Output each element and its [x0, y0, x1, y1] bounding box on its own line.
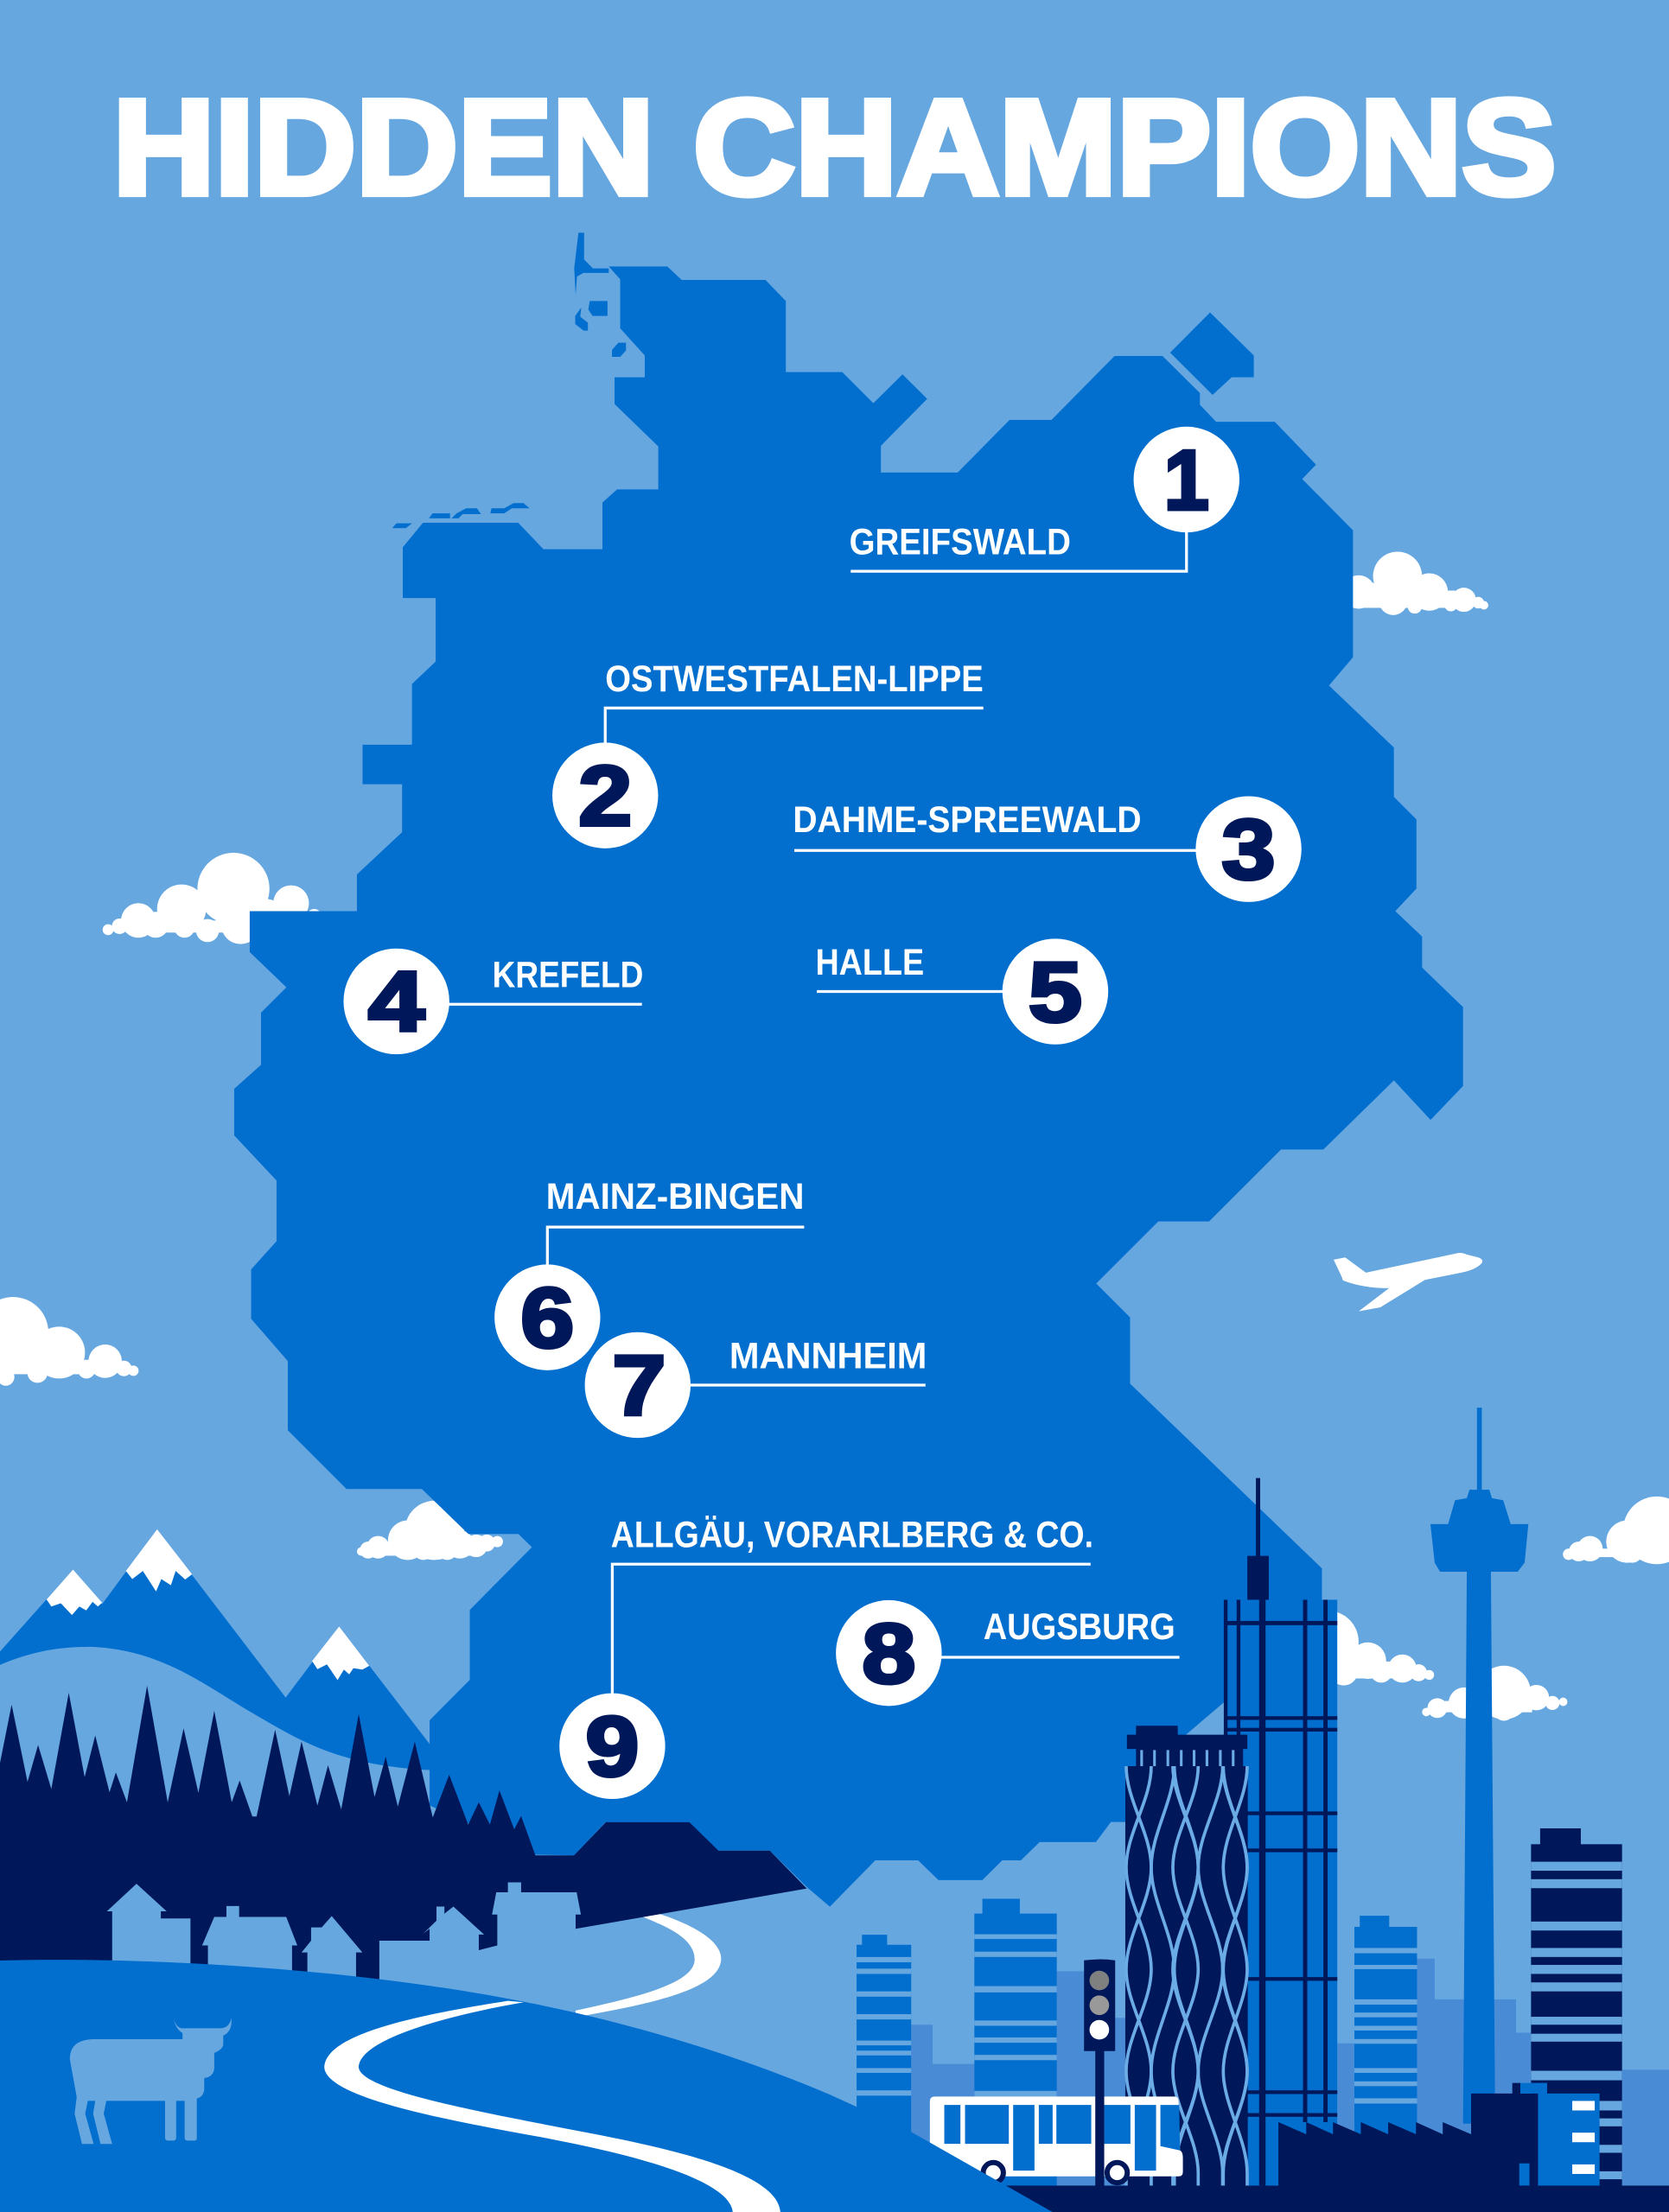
- ground: [991, 2185, 1669, 2212]
- location 6: Mainz-Bingen: [494, 1176, 804, 1370]
- striped building 3: [1354, 1916, 1417, 2185]
- TV tower: [1430, 1408, 1528, 2124]
- location 7: Mannheim: [585, 1332, 927, 1438]
- river: far bend: [564, 1914, 721, 2017]
- alpine landscape: [0, 1529, 806, 2017]
- leader line: [817, 991, 1013, 993]
- leader line: [440, 1003, 642, 1005]
- clouds: [0, 551, 1669, 1720]
- number badge: 8: [862, 1605, 915, 1700]
- foothill: [0, 1647, 430, 1848]
- traffic light: [1084, 1960, 1115, 2188]
- leader line: [605, 708, 984, 754]
- bus and traffic light: [930, 1960, 1183, 2188]
- bus: [930, 2096, 1183, 2183]
- location 1: Greifswald: [850, 427, 1239, 571]
- striped building 1: [857, 1935, 911, 2185]
- location 9: Allgäu, Vorarlberg & Co.: [559, 1515, 1093, 1799]
- number badge: [1003, 938, 1108, 1045]
- leader line: [931, 1656, 1180, 1658]
- foreground hill: [0, 1960, 1053, 2212]
- factory and ground: [991, 2083, 1669, 2212]
- label: GREIFSWALD: [850, 522, 1071, 563]
- number badge: [343, 949, 449, 1054]
- map of Germany: [234, 232, 1463, 1907]
- number badge: [494, 1264, 601, 1370]
- leader line: [850, 522, 1187, 571]
- leader line: [680, 1384, 926, 1386]
- number badge: 3: [1222, 802, 1276, 897]
- factory office block: [1519, 2083, 1600, 2185]
- label: MAINZ-BINGEN: [546, 1176, 804, 1217]
- map mainland: [234, 266, 1463, 1907]
- number badge: 2: [578, 748, 632, 843]
- number badge: [552, 742, 658, 849]
- background buildings: [911, 1959, 1669, 2185]
- number badge: [585, 1332, 691, 1438]
- location 3: Dahme-Spreewald: [793, 796, 1302, 902]
- location 4: Krefeld: [343, 949, 643, 1054]
- number badge: [1134, 427, 1239, 532]
- cloud: behind glass tower: [1296, 1611, 1434, 1686]
- round tower with wave facade: [1125, 1766, 1248, 2187]
- number badge: 5: [1029, 944, 1082, 1039]
- location 8: Augsburg: [836, 1600, 1180, 1706]
- striped building 2: [974, 1898, 1057, 2185]
- cloud: above mountains: [357, 1501, 503, 1560]
- number badge: [836, 1600, 942, 1706]
- cloud: behind TV tower: [1422, 1666, 1567, 1720]
- label: HALLE: [815, 942, 924, 982]
- number badge: 1: [1164, 432, 1209, 527]
- label: AUGSBURG: [984, 1606, 1175, 1647]
- number badge: 6: [520, 1270, 574, 1365]
- navy striped building: [1531, 1828, 1622, 2185]
- houses: [107, 1883, 581, 2014]
- leader line: [794, 849, 1207, 851]
- cloud: far right: [1563, 1497, 1669, 1564]
- number badge: 4: [368, 954, 424, 1049]
- location 5: Halle: [815, 938, 1108, 1045]
- label: KREFELD: [493, 955, 643, 995]
- leader line: [612, 1564, 1091, 1707]
- number badge: [559, 1694, 666, 1799]
- snow caps: [47, 1529, 369, 1680]
- cloud: right of map: [1342, 551, 1488, 615]
- icon: cow: [70, 2017, 232, 2144]
- forest silhouette: [0, 1686, 806, 1991]
- river: near bend: [324, 2001, 780, 2212]
- label: OSTWESTFALEN-LIPPE: [605, 658, 984, 699]
- glass tower: [1224, 1478, 1337, 2185]
- cloud: left of map: [103, 853, 322, 944]
- location 2: Ostwestfalen-Lippe: [552, 658, 984, 849]
- map: North Sea islands: [392, 232, 626, 528]
- number badge: 9: [585, 1699, 639, 1794]
- number badge: [1195, 796, 1302, 902]
- city skyline: [857, 1408, 1669, 2185]
- leader line: [547, 1227, 804, 1276]
- label: DAHME-SPREEWALD: [793, 799, 1142, 840]
- map: Baltic island: [1170, 313, 1254, 395]
- title: HIDDEN CHAMPIONS: [113, 72, 1556, 223]
- icon: airplane: [1334, 1253, 1482, 1312]
- cloud: left edge: [0, 1297, 138, 1386]
- label: ALLGÄU, VORARLBERG & CO.: [611, 1515, 1093, 1555]
- number badge: 7: [612, 1338, 666, 1433]
- mountains: [0, 1529, 430, 1848]
- label: MANNHEIM: [729, 1335, 927, 1376]
- crown of round building: [1127, 1726, 1247, 1766]
